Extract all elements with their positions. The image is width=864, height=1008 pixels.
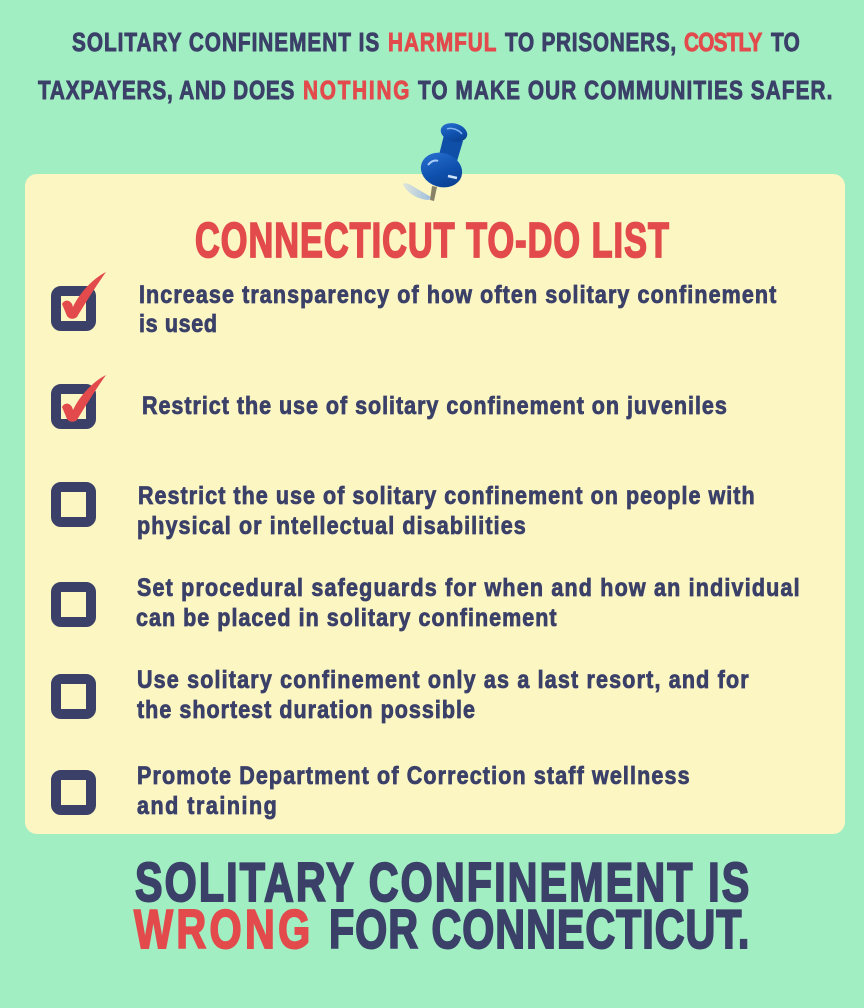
item 1: checked (56, 272, 776, 337)
icon: empty box (56, 587, 91, 622)
closing statement: SOLITARY CONFINEMENT IS (135, 852, 749, 913)
icon: empty box (56, 487, 91, 522)
item 6: unchecked: Promote Department of Correction staff wellness (137, 761, 690, 789)
intro statement: HARMFUL (388, 28, 496, 57)
item 5: unchecked: the shortest duration possible (137, 695, 475, 723)
icon: checked box (56, 375, 106, 424)
item 5: unchecked (56, 665, 749, 723)
heading: CONNECTICUT TO-DO LIST (195, 213, 669, 267)
closing statement: WRONG (134, 899, 310, 960)
item 3: unchecked: physical or intellectual disabilities (137, 511, 526, 539)
icon: empty box (56, 679, 91, 714)
item 4: unchecked (56, 573, 800, 631)
item 2: checked (56, 375, 727, 424)
icon: checked box (56, 272, 106, 326)
closing statement: FOR CONNECTICUT. (329, 899, 749, 960)
item 4: unchecked: can be placed in solitary confinement (136, 603, 557, 631)
intro statement: COSTLY (684, 28, 763, 57)
intro statement: TO PRISONERS, (505, 28, 676, 57)
panel: to-do list (25, 174, 845, 834)
intro statement: TAXPAYERS, AND DOES (38, 76, 294, 105)
item 5: unchecked: Use solitary confinement only as a last resort, and for (137, 665, 749, 693)
icon: blue push pin (403, 120, 469, 201)
item 4: unchecked: Set procedural safeguards for when and how an individual (137, 573, 800, 601)
item 1: checked: Increase transparency of how often solitary confinement (139, 280, 776, 308)
intro statement: TO (771, 28, 800, 57)
item 3: unchecked: Restrict the use of solitary confinement on people with (138, 481, 755, 509)
item 6: unchecked (56, 761, 690, 819)
item 2: checked: Restrict the use of solitary confinement on juveniles (142, 391, 727, 419)
item 3: unchecked (56, 481, 755, 539)
closing statement (134, 852, 749, 960)
intro statement: SOLITARY CONFINEMENT IS (72, 28, 379, 57)
intro statement: TO MAKE OUR COMMUNITIES SAFER. (418, 76, 832, 105)
item 6: unchecked: and training (137, 791, 277, 819)
intro statement: NOTHING (303, 76, 409, 105)
icon: empty box (56, 775, 91, 810)
intro statement (38, 28, 832, 105)
item 1: checked: is used (139, 309, 217, 337)
